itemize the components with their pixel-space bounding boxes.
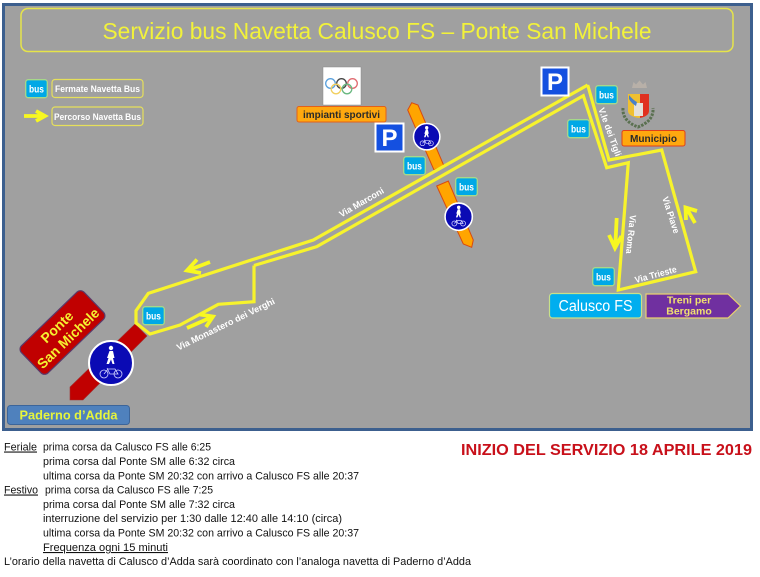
timetable: [4, 442, 472, 568]
icon: parking sign centre: [376, 124, 404, 152]
Paderno d'Adda label: [8, 406, 130, 424]
bus stop: Via Marconi south: [456, 178, 477, 196]
icon: lower pedestrian and cycle sign: [445, 203, 472, 230]
holiday timetable: prima corsa dal Ponte SM alle 7:32 circa: [43, 499, 236, 511]
cycle path upper segment: [408, 103, 444, 170]
bus stop: Ponte San Michele: bus: [146, 310, 161, 322]
frequency note: Frequenza ogni 15 minuti: [43, 542, 168, 554]
Ponte San Michele label: [18, 289, 107, 376]
bus stop: Viale dei Tigli west: [568, 120, 589, 138]
map panel: [4, 4, 752, 430]
bus stop: Viale dei Tigli west: bus: [571, 124, 586, 136]
arrow: via Roma: [609, 218, 622, 248]
coordination note: L’orario della navetta di Calusco d’Adda sarà coordinato con l’analoga navetta di Paderno d’Adda: [4, 556, 472, 568]
icon: parking sign right: [542, 68, 568, 96]
bus stop: Viale dei Tigli east: bus: [599, 90, 614, 102]
street label: Via Roma: Via Roma: [624, 214, 638, 255]
weekday timetable: ultima corsa da Ponte SM 20:32 con arrivo a Calusco FS alle 20:37: [43, 470, 359, 482]
Calusco FS label: Calusco FS: [558, 298, 632, 315]
holiday timetable: [4, 484, 359, 540]
bus stop: Ponte San Michele: [143, 307, 164, 325]
street label: Via Trieste: Via Trieste: [634, 264, 678, 285]
street label: Via Piave: Via Piave: [660, 195, 681, 235]
weekday timetable: [4, 442, 359, 482]
holiday timetable: prima corsa da Calusco FS alle 7:25: [45, 484, 213, 496]
Paderno d'Adda label: Paderno d’Adda: [20, 408, 118, 422]
legend: bus stop: [26, 80, 143, 98]
weekday timetable: Feriale: [4, 442, 37, 454]
route line: [136, 85, 696, 334]
cycle path lower segment: [437, 181, 473, 247]
icon: municipal crest: [623, 80, 653, 127]
Ponte San Michele label: Ponte: [37, 307, 77, 346]
holiday timetable: ultima corsa da Ponte SM 20:32 con arrivo a Calusco FS alle 20:37: [43, 528, 359, 540]
service start notice: INIZIO DEL SERVIZIO 18 APRILE 2019: [461, 442, 752, 459]
legend: bus stop: bus: [29, 84, 44, 96]
Treni per Bergamo arrow label: Bergamo: [666, 306, 712, 318]
bus stop: Calusco station: [593, 268, 614, 286]
icon: Olympic rings sports facilities: [323, 67, 361, 105]
Treni per Bergamo arrow label: [646, 294, 740, 318]
impianti sportivi label: [297, 106, 386, 122]
arrow: via Piave: [686, 208, 697, 223]
icon: parking sign right: P: [547, 69, 563, 96]
weekday timetable: prima corsa dal Ponte SM alle 6:32 circa: [43, 456, 236, 468]
icon: upper pedestrian and cycle sign: [414, 124, 440, 150]
arrow: toward Ponte San Michele: [187, 260, 210, 273]
weekday timetable: prima corsa da Calusco FS alle 6:25: [43, 442, 211, 454]
street label: Via Marconi: Via Marconi: [337, 186, 386, 219]
Calusco FS label: [550, 294, 642, 318]
Municipio label: [622, 130, 685, 146]
bridge near San Michele: [70, 324, 147, 400]
bus stop: Via Marconi north: [404, 157, 425, 175]
impianti sportivi label: impianti sportivi: [303, 110, 380, 121]
bus stop: Viale dei Tigli east: [596, 86, 617, 104]
street label: Viale dei Tigli: V.le dei Tigli: [596, 106, 623, 158]
legend: [24, 80, 143, 126]
Treni per Bergamo arrow label: Treni per: [667, 294, 711, 306]
title: [21, 8, 733, 52]
legend: route arrow: Percorso Navetta Bus: [54, 112, 141, 122]
holiday timetable: Festivo: [4, 484, 38, 496]
icon: large pedestrian and cycle sign: [89, 341, 133, 385]
street label: Via Monastero dei Verghi: Via Monastero dei Verghi: [175, 296, 276, 352]
icon: parking sign centre: P: [381, 125, 398, 152]
bus stop: Via Marconi south: bus: [459, 182, 474, 194]
title: Servizio bus Navetta Calusco FS – Ponte San Michele: [102, 18, 652, 44]
legend: bus stop: Fermate Navetta Bus: [55, 84, 140, 94]
bus stop: Via Marconi north: bus: [407, 160, 422, 172]
holiday timetable: interruzione del servizio per 1:30 dalle 12:40 alle 14:10 (circa): [43, 513, 342, 525]
arrow: via Monastero: [187, 314, 213, 328]
bus stop: Calusco station: bus: [596, 272, 611, 284]
Ponte San Michele label: San Michele: [34, 305, 103, 372]
Municipio label: Municipio: [630, 134, 677, 145]
